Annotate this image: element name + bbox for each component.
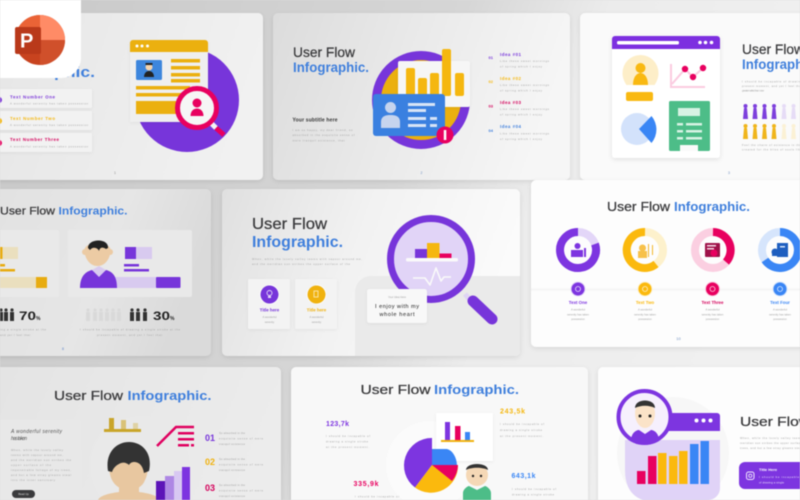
step: Text Four: possession <box>773 317 787 321</box>
stat: 70 percent: ing a single stroke at the <box>0 328 47 332</box>
subtitle text block: Your subtitle here <box>292 118 338 124</box>
text block: When, while the lovely valley teems with vapour around me, <box>252 257 362 261</box>
pagination: 8 <box>62 347 64 351</box>
heading: User Flow <box>54 388 124 403</box>
heading: User Flow <box>607 200 671 214</box>
list: ideas 01 to 04: Idea #04 <box>500 124 522 129</box>
step: Text One: A wonderful <box>571 308 585 312</box>
panel: slide 2 subtitle and ideas <box>273 13 570 180</box>
list: three text rows: A wonderful serenity has taken possession <box>10 123 88 127</box>
backdrop circle <box>617 397 729 500</box>
inner shaded block <box>355 276 520 356</box>
heading: User Flow <box>0 206 55 218</box>
list: numbered items: 03 <box>205 483 215 493</box>
stat: 335,9k: 335,9k <box>354 481 379 488</box>
callout: quote: Your Idea Here <box>388 295 406 299</box>
logo: PowerPoint badge <box>0 0 81 78</box>
card: title here yellow: serenity <box>312 320 322 324</box>
stat: 335,9k: I should be incapable of <box>355 494 399 498</box>
step: Text One: serenity has taken <box>567 312 589 316</box>
list: numbered items: tranquil existence <box>219 468 246 472</box>
list: numbered items: tranquil existence <box>219 442 246 446</box>
pagination: 1 <box>114 171 116 175</box>
stat: 643,1k: I should be incapable of <box>512 487 556 491</box>
text card: Read Up <box>18 492 29 496</box>
pagination: 2 <box>421 171 423 175</box>
list: three text rows: Text Number Three <box>10 137 60 142</box>
step: Text Four: Text Four <box>770 300 790 305</box>
list: three text rows: Text Number One <box>10 94 56 100</box>
subtitle text block: I am so happy, my dear friend, so <box>292 128 353 132</box>
list: numbered items <box>205 431 264 498</box>
text card: has taken <box>11 436 27 442</box>
step: Text Two <box>634 282 656 321</box>
step: Text One: Text One <box>569 300 588 305</box>
illustration: person with charts <box>90 416 194 500</box>
guide line <box>531 288 800 290</box>
heading <box>293 45 369 75</box>
text card: When, while the lovely valley <box>11 448 64 452</box>
subtitle text block <box>292 118 355 142</box>
heading: User Flow <box>252 216 327 233</box>
list: numbered items: So absorbed in the <box>219 431 246 435</box>
heading <box>360 382 519 397</box>
list: numbered items: exquisite sense of mere <box>219 436 264 440</box>
step: Text One <box>567 282 589 321</box>
stat: 643,1k: 643,1k <box>512 473 536 480</box>
list: ideas 01 to 04: of spring which I enjoy <box>500 112 543 116</box>
text card: impenetrable foliage of my trees, <box>11 468 71 472</box>
list: ideas 01 to 04 <box>488 52 550 141</box>
heading: User Flow <box>740 414 800 429</box>
panel: slide 4 gender split <box>0 189 211 356</box>
step: Text Two: serenity has taken <box>634 312 656 316</box>
stat: 70 percent <box>0 308 47 337</box>
stat: 643,1k: drawing a single stroke <box>512 492 554 496</box>
illustration: pie chart with person <box>386 413 493 500</box>
text card: upper surface of the <box>11 463 51 467</box>
text card: A wonderful serenity <box>10 429 62 435</box>
illustration: magnifier with chart <box>390 218 492 319</box>
stat: 123,7k: at the present moment. <box>326 445 369 449</box>
text block <box>740 436 800 450</box>
stat: 30 percent: % <box>170 316 175 322</box>
list: ideas 01 to 04: of spring which I enjoy <box>500 137 543 141</box>
panel: slide 6 donut charts <box>531 180 800 347</box>
donut: blue <box>762 232 798 268</box>
callout: quote: I enjoy with my <box>375 304 419 310</box>
heading: Infographic. <box>434 382 519 397</box>
heading: Infographic. <box>128 388 212 403</box>
card: title here yellow: Title here <box>307 308 327 312</box>
panel: slide 7 numbered list and person <box>0 367 281 500</box>
card: title here yellow <box>295 279 337 329</box>
stat: 70 percent: 70 <box>19 309 36 323</box>
step: Text Two: A wonderful <box>638 308 652 312</box>
card: title here purple: Title here <box>260 308 280 312</box>
text block: caption <box>742 143 800 152</box>
stat: 243,5k: 243,5k <box>500 408 525 416</box>
stat: 123,7k: drawing a single stroke <box>326 440 368 444</box>
list: numbered items: 02 <box>205 457 215 467</box>
heading <box>607 200 750 214</box>
step: Text Three: A wonderful <box>705 308 720 312</box>
heading: Infographic. <box>252 234 343 251</box>
list: three text rows: A wonderful serenity has taken possession <box>10 144 88 148</box>
heading <box>252 216 343 251</box>
donut: yellow <box>627 232 663 268</box>
heading <box>0 206 128 218</box>
pictogram rows: purple and yellow people <box>743 104 796 139</box>
callout: title here: Title Here <box>759 467 778 472</box>
heading <box>54 388 212 403</box>
list: three text rows: Text Number Two <box>10 116 55 121</box>
stat: 123,7k: 123,7k <box>326 421 349 428</box>
list: ideas 01 to 04: Idea #01 <box>500 52 522 57</box>
stat: 123,7k: I should be incapable of <box>326 434 370 438</box>
callout: title here <box>739 462 800 489</box>
illustration: window with bars <box>618 391 720 500</box>
stat: 123,7k <box>326 421 370 449</box>
callout: quote <box>367 289 427 323</box>
heading: User Flow <box>293 45 355 60</box>
list: ideas 01 to 04: of spring which I enjoy <box>500 64 543 68</box>
panel: slide 8 stats and pie <box>291 367 588 500</box>
list: ideas 01 to 04: Like these sweet mornings <box>500 59 550 63</box>
card: title here yellow: A wonderful <box>309 315 324 319</box>
subtitle text block: absorbed in the exquisite sense of <box>292 133 355 137</box>
stat: 243,5k: at the present moment. <box>500 434 543 438</box>
panel: slide 5 magnifier <box>222 189 520 356</box>
text card: teems with vapour around me, <box>11 453 63 457</box>
text card: into the inner sanctuary <box>11 478 56 482</box>
heading fragment: phic. <box>54 64 95 81</box>
illustration: dashboard window <box>612 36 720 158</box>
donut: purple <box>560 232 596 268</box>
list: ideas 01 to 04: Like these sweet mornings <box>500 83 550 87</box>
list: numbered items: So absorbed in the <box>219 483 246 487</box>
callout: title here: of drawing a single <box>759 480 784 484</box>
stat: 30 percent: 30 <box>153 309 170 323</box>
list: numbered items: 01 <box>205 433 215 443</box>
card: title here purple <box>248 279 290 329</box>
list: numbered items: exquisite sense of mere <box>219 488 264 492</box>
list: ideas 01 to 04: 04 <box>488 128 494 133</box>
list: three text rows <box>0 89 92 152</box>
heading: User Flow <box>360 382 431 397</box>
list: numbered items: So absorbed in the <box>219 457 246 461</box>
pagination: 10 <box>676 336 681 341</box>
list: ideas 01 to 04: Like these sweet mornings <box>500 132 550 136</box>
text card: and the meridian sun strikes the <box>11 458 72 462</box>
stat: 243,5k <box>500 408 544 438</box>
panel: slide 9 profile bar chart <box>598 367 800 500</box>
list: ideas 01 to 04: Idea #03 <box>500 100 522 105</box>
step: Text Four: A wonderful <box>773 308 787 312</box>
step: Text Three: Text Three <box>702 300 724 305</box>
list: ideas 01 to 04: 01 <box>488 55 494 60</box>
stat: 243,5k: drawing a single stroke <box>500 428 542 432</box>
list: ideas 01 to 04: 03 <box>488 104 494 108</box>
illustration: chart and ID card <box>373 49 470 144</box>
callout: quote: whole heart <box>378 312 415 318</box>
list: ideas 01 to 04: of spring which I enjoy <box>500 88 543 92</box>
step: Text Two: Text Two <box>636 300 655 305</box>
card: title here purple: A wonderful <box>262 315 277 319</box>
list: three text rows: A wonderful serenity has taken possession <box>10 102 88 106</box>
step: Text Four: serenity has taken <box>769 312 791 316</box>
pagination: 3 <box>728 171 730 175</box>
list: ideas 01 to 04: 02 <box>488 79 494 84</box>
logo: PowerPoint badge: P <box>20 30 33 52</box>
stat: 243,5k: I should be incapable of <box>500 422 544 426</box>
panel: slide 3 dashboard window <box>580 13 800 180</box>
subtitle text block: mere tranquil existence, that <box>292 138 345 142</box>
step: Text One: possession <box>571 317 585 321</box>
heading <box>742 42 800 72</box>
step: Text Two: possession <box>638 317 652 321</box>
stat: 30 percent: present moment, and yet I feel that <box>97 333 162 337</box>
heading: Infographic. <box>58 206 128 218</box>
text block: intro <box>742 80 800 92</box>
text block <box>252 257 362 266</box>
stat: 70 percent: and yet I feel that <box>0 333 30 337</box>
stat: 30 percent: I should be incapable of drawing a single stroke at the <box>80 328 181 332</box>
list: ideas 01 to 04: Like these sweet mornings <box>500 107 550 111</box>
list: numbered items: tranquil existence <box>219 494 246 498</box>
step: Text Three: serenity has taken <box>702 312 724 316</box>
stat: 335,9k <box>354 481 399 498</box>
stat: 643,1k <box>512 473 556 496</box>
text block: intro: greater artist than now <box>742 88 764 92</box>
list: ideas 01 to 04: Idea #02 <box>500 76 522 81</box>
heading: Infographic. <box>674 200 750 214</box>
donut: pink <box>695 232 731 268</box>
heading: Infographic. <box>293 60 369 75</box>
panel: slide 1 search profile <box>0 13 263 180</box>
text card <box>0 420 81 500</box>
stat: 70 percent: % <box>36 316 41 322</box>
list: numbered items: exquisite sense of mere <box>219 462 264 466</box>
card: title here purple: serenity <box>265 320 275 324</box>
card: yellow person <box>0 230 59 297</box>
step: Text Three <box>702 282 724 321</box>
card: purple person <box>68 230 192 297</box>
illustration: profile window and magnifier <box>130 40 239 152</box>
text block: and the meridian sun strikes the upper surface of the <box>252 262 350 266</box>
text card: and but a few stray gleams steal <box>11 473 71 477</box>
step: Text Four <box>769 282 791 321</box>
stat: 30 percent <box>80 308 181 337</box>
callout: title here: I should be incapable <box>759 475 799 479</box>
step: Text Three: possession <box>706 317 720 321</box>
